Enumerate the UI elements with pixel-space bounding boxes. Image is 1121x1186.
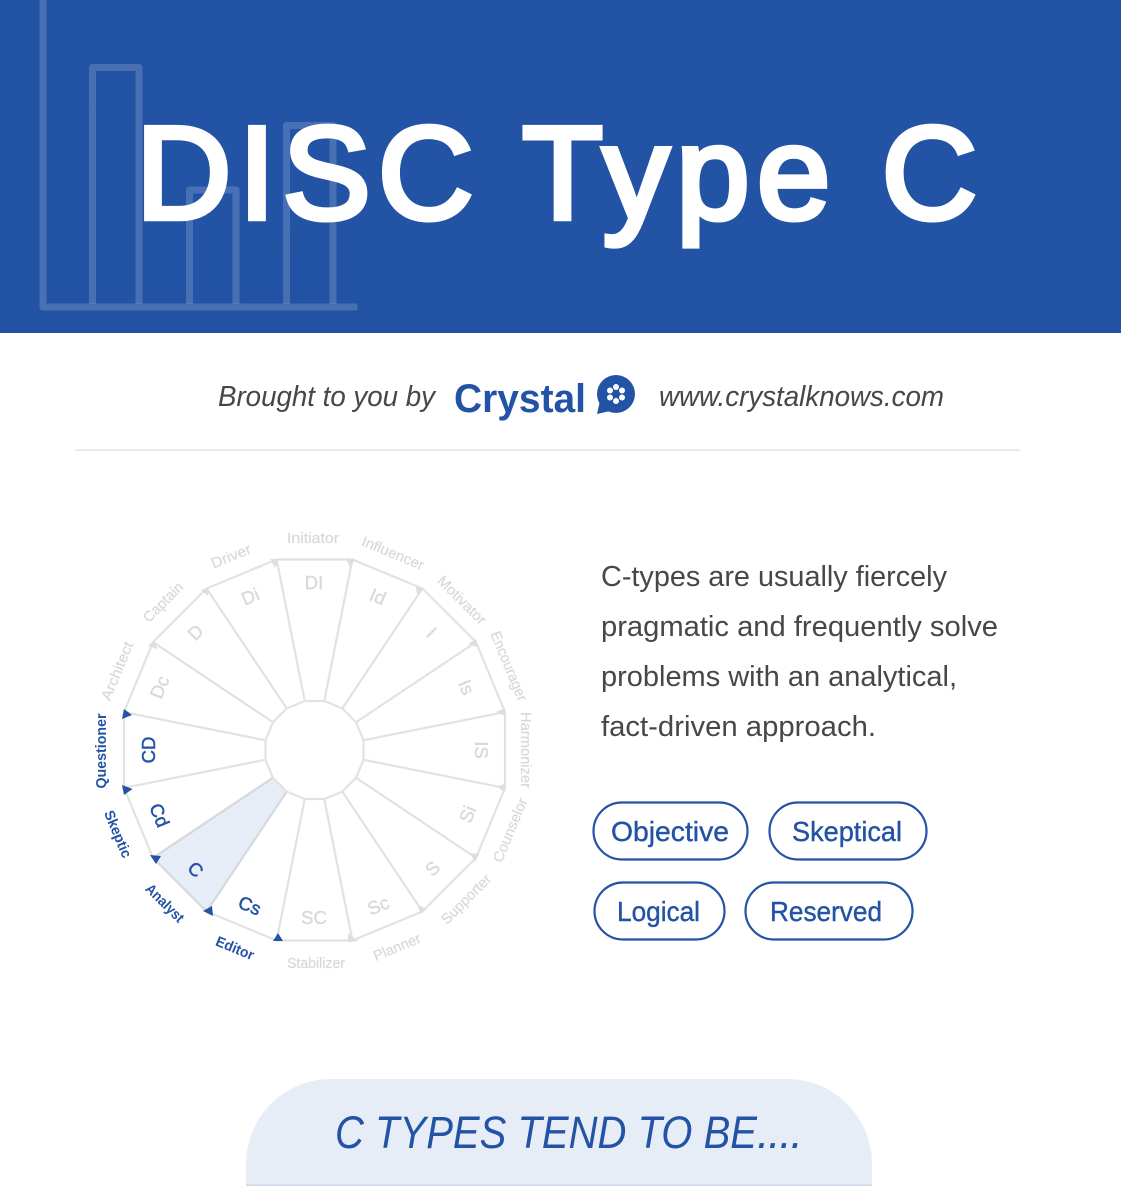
inner segment labels: Id — [367, 584, 389, 609]
credit text: Brought to you by — [218, 381, 436, 413]
outer type labels: Supporter — [438, 871, 495, 928]
DISC wheel chart — [94, 531, 533, 972]
brought-to-you-by row — [218, 375, 944, 421]
inner segment labels: Sc — [364, 892, 392, 919]
inner segment labels — [138, 572, 492, 928]
outer type labels: Questioner — [94, 713, 110, 788]
inner segment labels: I — [422, 623, 441, 642]
inner segment labels: IS — [471, 741, 492, 759]
blue vertex markers — [122, 709, 283, 941]
outer type labels: Harmonizer — [517, 712, 533, 788]
outer type labels: Driver — [209, 541, 254, 572]
inner segment labels: DI — [305, 572, 323, 593]
trait pill: Logical: Logical — [617, 896, 700, 927]
inner segment labels: CD — [138, 737, 159, 763]
website: www.crystalknows.com — [659, 381, 944, 413]
inner segment labels: SC — [301, 907, 327, 928]
section heading tab — [246, 1079, 872, 1186]
description paragraph — [601, 561, 998, 743]
outer type labels: Stabilizer — [287, 956, 345, 972]
header banner — [0, 0, 1121, 333]
description paragraph: fact-driven approach. — [601, 711, 876, 743]
description paragraph: pragmatic and frequently solve — [601, 611, 998, 643]
bar chart icon — [43, 0, 358, 307]
trait pill: Objective: Objective — [611, 816, 729, 847]
title: DISC Type C — [136, 100, 977, 246]
description paragraph: problems with an analytical, — [601, 661, 957, 693]
grey vertex markers — [148, 558, 506, 942]
outer type labels: Editor — [213, 934, 256, 964]
inner segment labels: S — [421, 857, 444, 880]
inner segment labels: Si — [455, 803, 480, 826]
trait pill: Objective — [594, 802, 748, 860]
Crystal wordmark: Crystal — [454, 377, 586, 421]
outer type labels: Planner — [371, 931, 424, 965]
trait pill: Reserved — [746, 882, 912, 940]
outer type labels: Skeptic — [100, 808, 134, 861]
inner segment labels: Is — [454, 677, 479, 698]
inner segment labels: Dc — [145, 673, 173, 702]
inner segment labels: Di — [238, 583, 262, 610]
outer type labels: Motivator — [434, 573, 489, 628]
outer type labels: Counselor — [491, 796, 531, 865]
trait pill: Skeptical — [770, 802, 926, 860]
icon: Crystal speech bubble flower — [597, 375, 635, 414]
inner segment labels: D — [183, 620, 208, 645]
trait pill: Reserved: Reserved — [770, 896, 882, 927]
outer type labels: Influencer — [359, 534, 426, 574]
inner segment labels: Cd — [145, 800, 174, 830]
heading text: .... — [757, 1107, 803, 1158]
outer type labels: Architect — [99, 640, 137, 703]
inner segment labels: C — [183, 857, 208, 882]
inner segment labels: Cs — [235, 891, 264, 919]
trait pill: Skeptical: Skeptical — [792, 816, 902, 847]
highlighted segment: C — [153, 778, 287, 912]
outer type labels: Analyst — [142, 881, 187, 926]
heading text: C TYPES TEND TO BE — [335, 1107, 758, 1158]
description paragraph: C-types are usually fiercely — [601, 561, 947, 593]
wheel outline and spokes — [124, 560, 505, 940]
outer type labels: Captain — [140, 579, 187, 626]
trait pill: Logical — [594, 882, 724, 940]
outer type labels — [94, 531, 533, 972]
outer type labels: Initiator — [287, 531, 339, 547]
outer type labels: Encourager — [487, 629, 530, 704]
